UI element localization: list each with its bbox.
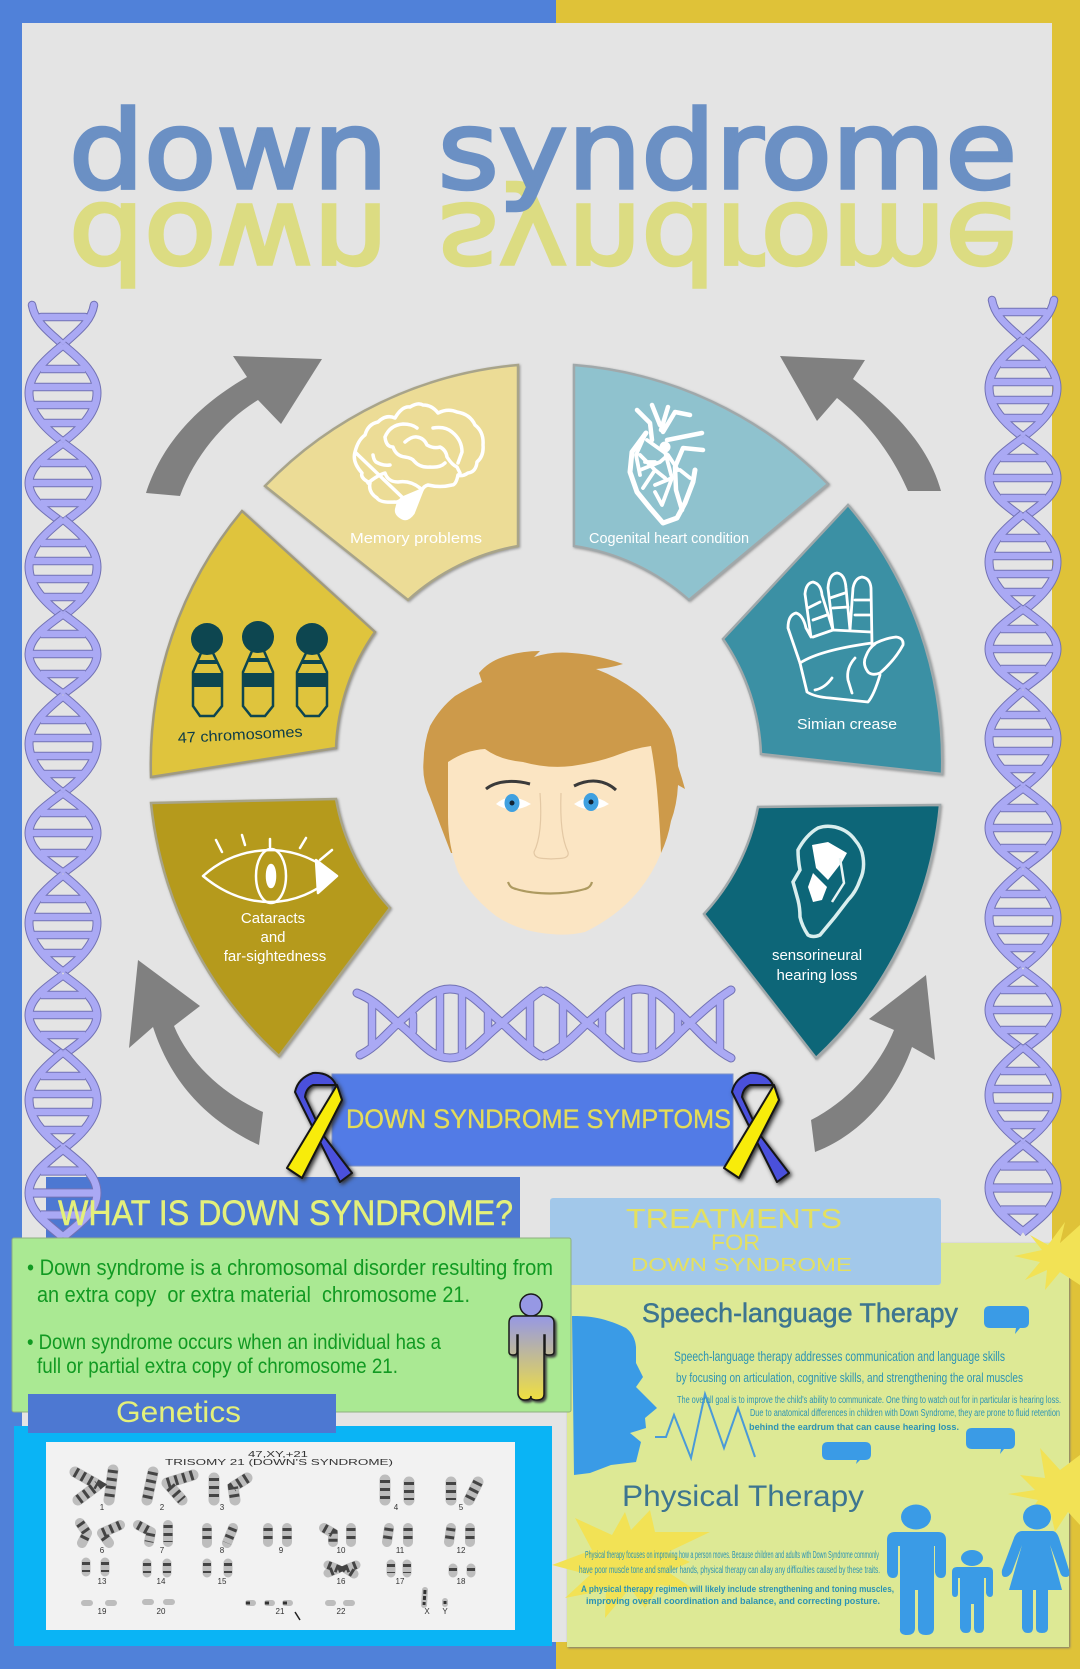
panel: cataracts	[151, 799, 390, 1056]
woman	[1002, 1504, 1070, 1633]
panel: definition: full or partial extra copy of chromosome 21.	[37, 1355, 398, 1378]
karyotype chart: 16	[337, 1577, 346, 1586]
icon: speech bubble 3	[822, 1442, 871, 1464]
label: hearing loss	[777, 967, 857, 984]
burst top right	[1014, 1222, 1080, 1290]
icon: DNA horizontal	[357, 989, 731, 1058]
title: down	[69, 89, 388, 214]
nose	[534, 793, 568, 859]
karyotype chart: 7	[160, 1546, 165, 1555]
speech therapy text: behind the eardrum that can cause hearing loss.	[749, 1422, 959, 1433]
panel: hearing loss	[704, 805, 940, 1058]
karyotype chart: 8	[220, 1546, 225, 1555]
karyotype chart: 4	[394, 1503, 399, 1512]
karyotype chart: 20	[157, 1607, 166, 1616]
karyotype chart: 12	[457, 1546, 466, 1555]
eyebrows	[486, 781, 616, 790]
icon: person	[509, 1294, 554, 1400]
speech therapy text	[674, 1348, 1061, 1433]
icon: family	[887, 1504, 1070, 1635]
karyotype chart: 11	[396, 1546, 405, 1555]
karyotype chart: 6	[100, 1546, 105, 1555]
heading: speech therapy: Speech-language Therapy	[642, 1298, 958, 1328]
icon: hand	[788, 573, 903, 702]
heading: what is down syndrome: WHAT IS DOWN SYNDROME?	[58, 1194, 513, 1233]
panel: simian crease	[723, 505, 942, 774]
karyotype chart: 18	[457, 1577, 466, 1586]
physical therapy text: improving overall coordination and balance, and correcting posture.	[586, 1596, 880, 1607]
background: yellow half	[556, 0, 1080, 1669]
icon: ribbon left	[287, 1073, 352, 1182]
icon: ribbon right	[724, 1073, 789, 1182]
panel: 47 chromosomes	[151, 511, 375, 777]
icon: heart	[630, 405, 703, 523]
burst right	[1008, 1448, 1080, 1532]
header: treatments	[550, 1198, 941, 1285]
karyotype chart	[46, 1442, 515, 1630]
header box: what is down syndrome	[46, 1177, 520, 1239]
title with reflection	[69, 89, 1017, 304]
mouth	[508, 882, 592, 894]
panel: definition	[12, 1238, 571, 1412]
title reflection: down	[69, 179, 388, 304]
panel: genetics	[14, 1426, 552, 1646]
karyotype chart: 2	[160, 1503, 165, 1512]
child	[952, 1550, 993, 1633]
karyotype chart: 3	[220, 1503, 225, 1512]
banner: symptoms	[332, 1074, 733, 1166]
burst lower left	[552, 1510, 710, 1618]
panel: memory problems	[265, 365, 518, 600]
panel: treatments background	[567, 1243, 1069, 1647]
karyotype chart: TRISOMY 21 (DOWN'S SYNDROME)	[165, 1458, 394, 1467]
hair	[423, 651, 685, 853]
panel: heart condition	[574, 365, 828, 600]
label: Cataracts	[241, 910, 305, 927]
karyotype chart: X	[424, 1607, 430, 1616]
arrow bottom right	[811, 975, 935, 1152]
header: treatments: FOR	[711, 1230, 760, 1255]
karyotype chart: 22	[337, 1607, 346, 1616]
karyotype chart: 1	[100, 1503, 105, 1512]
physical therapy text	[579, 1550, 894, 1607]
DNA strand left	[29, 305, 97, 1237]
physical therapy text: A physical therapy regimen will likely include strengthening and toning muscles,	[581, 1584, 894, 1594]
karyotype chart: 9	[279, 1546, 284, 1555]
karyotype chart: 15	[218, 1577, 227, 1586]
background: blue half	[0, 0, 556, 1669]
karyotype chart: 19	[98, 1607, 107, 1616]
title: syndrome	[438, 89, 1017, 214]
label: Cogenital heart condition	[589, 530, 749, 547]
icon: ear	[793, 826, 864, 936]
banner text: DOWN SYNDROME SYMPTOMS	[346, 1104, 731, 1134]
label: Memory problems	[350, 530, 482, 547]
karyotype chart: Y	[442, 1607, 448, 1616]
icon: sound wave	[655, 1394, 755, 1458]
header: treatments: DOWN SYNDROME	[631, 1255, 852, 1275]
physical therapy text: have poor muscle tone and smaller hands, physical therapy can allay any difficulties caused by these traits.	[579, 1565, 880, 1576]
header: genetics	[28, 1394, 336, 1433]
illustration: face	[423, 651, 685, 935]
icon: speech bubble 1	[984, 1306, 1029, 1334]
header: genetics: Genetics	[116, 1396, 241, 1429]
icon: chromosomes	[191, 621, 328, 716]
eyes	[496, 793, 609, 812]
panel: definition: an extra copy or extra material chromosome 21.	[37, 1282, 470, 1307]
label: and	[260, 929, 286, 946]
label: 47 chromosomes	[177, 723, 303, 747]
label: sensorineural	[772, 947, 862, 964]
bullet text: • Down syndrome occurs when an individual has a	[27, 1331, 441, 1354]
arrow bottom left	[129, 960, 263, 1145]
skin	[448, 746, 661, 935]
icon: brain	[354, 404, 483, 518]
karyotype chart: 10	[337, 1546, 346, 1555]
icon: head silhouette	[572, 1316, 657, 1475]
header: treatments: TREATMENTS	[626, 1203, 842, 1234]
karyotype chart: 47,XY,+21	[248, 1450, 309, 1459]
DNA strand right	[989, 300, 1057, 1232]
heading: physical therapy: Physical Therapy	[622, 1480, 864, 1513]
label: Simian crease	[797, 716, 897, 733]
arrow top left	[146, 356, 322, 496]
arrow top right	[780, 356, 941, 491]
title reflection	[69, 179, 1017, 304]
man	[887, 1504, 946, 1635]
karyotype chart: 17	[396, 1577, 405, 1586]
bullet text: • Down syndrome is a chromosomal disorder resulting from	[27, 1255, 553, 1280]
icon: eye	[203, 835, 337, 903]
label: far-sightedness	[224, 948, 326, 965]
karyotype chart: 14	[157, 1577, 166, 1586]
icon: speech bubble 2	[966, 1428, 1015, 1454]
karyotype chart: 5	[459, 1503, 464, 1512]
title	[69, 89, 1017, 214]
title reflection: syndrome	[438, 179, 1017, 304]
karyotype chart: 13	[98, 1577, 107, 1586]
karyotype chart: 21	[276, 1607, 285, 1616]
